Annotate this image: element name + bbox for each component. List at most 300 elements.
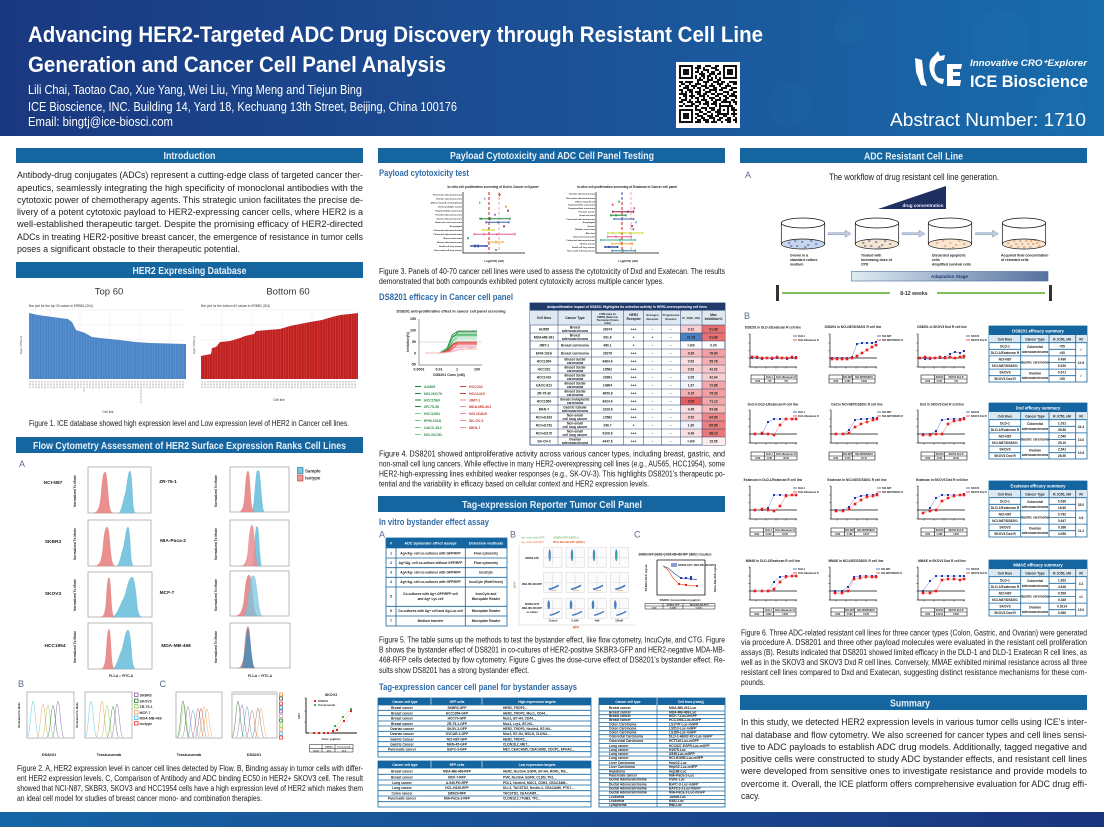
summary text: nal database and flow cytometry. We also screened for cancer types and cell lines sensi- xyxy=(741,730,1087,740)
table: RFP cells low expression targets: MDA-MB-468-RFP xyxy=(443,770,472,774)
resistance charts: Dxd row: SKOV3 xyxy=(971,411,980,414)
summary table: DS8201: 5.520 xyxy=(1058,364,1066,368)
flow plots: bystander co-culture: Ag+ cells with GFP xyxy=(521,536,545,540)
forest plot: Exatecan: Bile duct xyxy=(586,232,595,235)
table: bystander assays: Co-cultures with Ag+-GFP/RFP cell xyxy=(403,592,458,596)
logo: ICE Bioscience: Innovative CRO⁺Explorer xyxy=(970,58,1088,68)
table: DS8201 antiproliferative impact: Antiproliferative Impact of DS8201 Highlights its selective activity in HER2-overexpressing cell lines xyxy=(547,305,707,309)
table: DS8201 antiproliferative impact: - xyxy=(652,376,653,380)
resistance charts: Exatecan row: IC50 xyxy=(835,534,841,536)
summary table: MMAE: 4.818 xyxy=(1058,585,1066,589)
workflow arrows xyxy=(828,230,998,237)
summary table: MMAE: <1 xyxy=(1079,595,1083,599)
resistance charts: DS8201 row: DLD-1/Exatecan R xyxy=(798,339,819,342)
step captions: medium xyxy=(790,262,803,266)
table: DS8201 antiproliferative impact: Breast ductal xyxy=(565,366,586,370)
table: bystander assays: # xyxy=(390,542,393,546)
forest plot: Dxd: Log[IC50] (nM) xyxy=(484,259,504,263)
forest plot: Exatecan xyxy=(566,185,677,263)
resistance charts: Dxd row: DLD-1/Exatecan R xyxy=(798,415,819,418)
summary table: Dxd: Cancer Type xyxy=(1025,414,1045,418)
dose-curve chart: bystander effect: MDA-MB-468 signal xyxy=(713,564,717,592)
table: DS8201 antiproliferative impact: 75.33 xyxy=(709,392,718,396)
table: DS8201 antiproliferative impact: cell lung cancer xyxy=(563,433,588,437)
table: GFP cells high expression targets: OVCAR-3-GFP xyxy=(446,732,469,736)
table: DS8201 antiproliferative impact: - xyxy=(670,432,672,436)
summary table: DS8201: 0.490 xyxy=(1058,358,1066,362)
summary table: MMAE: MMAE efficacy summary xyxy=(1013,562,1063,567)
binding assay overlays B xyxy=(17,692,162,757)
summary table: DS8201: >55 xyxy=(1059,377,1065,381)
table: DS8201 antiproliferative impact: >100 xyxy=(687,440,695,444)
table: GFP cells high expression targets: Breast cancer xyxy=(391,706,414,710)
summary table: Dxd: 44.4 xyxy=(1078,425,1084,429)
table: DS8201 antiproliferative impact: Estrogen xyxy=(646,313,659,317)
step captions: CPD xyxy=(861,262,869,266)
resistance charts: Exatecan row: Exatecan in SKOV3 Dxd R cell line xyxy=(916,478,968,482)
summary table: Dxd: SKOV3 xyxy=(999,448,1011,452)
summary table: MMAE: DLD-1/Exatecan R xyxy=(991,585,1020,589)
authors and affiliation: Lili Chai, Taotao Cao, Xue Yang, Wei Liu, Ying Meng and Tiejun Bing xyxy=(28,83,362,97)
forest plot: Dxd xyxy=(431,185,539,263)
table: DS8201 antiproliferative impact: - xyxy=(652,416,653,420)
summary table: Exatecan: 0.386 xyxy=(1058,526,1066,530)
bar chart: top 60 xyxy=(19,286,186,414)
table: DS8201 antiproliferative impact: MDA-MB-361 xyxy=(534,336,554,340)
SKOV3 EC50 curve: Trastuzumab xyxy=(337,746,351,749)
table: DS8201 antiproliferative impact: 296.7 xyxy=(603,424,612,428)
summary table: Exatecan: DLD-1/Exatecan R xyxy=(991,506,1020,510)
table: ready cell lines: Breast cancer xyxy=(609,714,632,718)
summary table: DS8201: >55 xyxy=(1059,344,1065,348)
adaptation stage bar: Adaptation Stage xyxy=(931,274,968,279)
resistance charts: Dxd row: DLD-1/Exatecan R xyxy=(776,453,796,456)
table: bystander assays: Ag+/Ag- cell co-culture without GFP/RFP xyxy=(399,561,463,565)
table: DS8201 antiproliferative impact: Inhibition% xyxy=(705,317,722,321)
legend: cell lines: MKN-7 xyxy=(469,426,480,430)
table: DS8201 antiproliferative impact: - xyxy=(670,424,672,428)
resistance charts: Exatecan row: 0.530 xyxy=(766,534,772,536)
resistance charts: DS8201 row: >55 xyxy=(954,380,959,383)
table: ready cell lines: Lung cancer xyxy=(609,748,629,752)
table: DS8201 antiproliferative impact: 1.90 xyxy=(688,424,694,428)
table: DS8201 antiproliferative impact: 14804 xyxy=(603,384,612,388)
table: DS8201 antiproliferative impact: 91.86 xyxy=(709,336,718,340)
resistance charts: Exatecan row: NCI-N87/DS8201 R xyxy=(882,491,903,494)
line chart: DS8201 anti-proliferative effect: Inhibition(%) xyxy=(406,332,410,352)
summary table: Exatecan xyxy=(989,481,1087,537)
summary table: DS8201: DS8201 efficacy summary xyxy=(1012,328,1065,333)
summary table: Dxd: NCI-N87 xyxy=(999,434,1012,438)
summary table: Dxd xyxy=(989,403,1087,459)
histograms: high expressing lines: Normalized To Mode xyxy=(73,475,77,507)
table: RFP cells low expression targets: HCL-H226-RFP xyxy=(445,786,470,790)
resistance charts: Exatecan row: SKOV3 xyxy=(971,487,980,490)
summary table: Exatecan: 11.2 xyxy=(1078,529,1084,533)
summary table: MMAE: 15.0 xyxy=(1078,608,1084,612)
resistance charts: Dxd row: Dxd in DLD-1/Exatecan R cell line xyxy=(748,402,799,406)
histograms: high expressing lines xyxy=(44,467,152,678)
resistance charts: Exatecan row xyxy=(744,478,987,536)
table: bystander assays: IncuCyte xyxy=(479,570,493,574)
bar chart: top 60: Cell line xyxy=(102,410,114,414)
step captions: Acquired final concentration xyxy=(1001,254,1048,258)
table: RFP cells low expression targets xyxy=(378,761,591,807)
bar chart: bottom 60 xyxy=(192,286,358,402)
SKOV3 EC50 curve: SKOV3 xyxy=(325,693,337,697)
table: bystander assays: 1 xyxy=(390,552,392,556)
table: DS8201 antiproliferative impact: - xyxy=(670,368,672,372)
table: ready cell lines: LS513-Luc-mGFP xyxy=(669,726,697,730)
panel: flow cytometry assessment: Flow Cytometry Assessment of HER2 Surface Expression Ranks Cell Lines xyxy=(33,441,346,452)
summary table: Exatecan: RI xyxy=(1079,492,1083,496)
flow plots: bystander co-culture: 0.2nM xyxy=(572,620,578,622)
panel label B: B xyxy=(510,530,516,540)
resistance charts: MMAE row: 0.599 xyxy=(847,614,853,616)
summary table: Exatecan: Gastric carcinoma xyxy=(1021,516,1050,520)
table: DS8201 antiproliferative impact: NCI-H2170 xyxy=(536,432,552,436)
workflow diagram xyxy=(776,186,1052,301)
authors and affiliation xyxy=(28,83,457,129)
resistance charts: Dxd row: IC50 xyxy=(833,458,839,460)
step captions: of resistant cells xyxy=(1001,258,1029,262)
step captions: Discarded apoptotic xyxy=(932,254,966,258)
summary table: Dxd: adenocarcinoma xyxy=(1022,453,1048,457)
line chart: DS8201 anti-proliferative effect: 0.0001 xyxy=(414,368,424,372)
SKOV3 EC50 curve: DS8201 xyxy=(325,747,334,749)
table: DS8201 antiproliferative impact: adenocarcinoma xyxy=(562,409,588,413)
line chart: DS8201 anti-proliferative effect: 150 xyxy=(410,317,416,321)
summary table: Dxd: R_IC50, nM xyxy=(1053,414,1071,418)
resistance charts: MMAE row: SKOV3 Dxd R xyxy=(971,572,987,575)
summary table: Exatecan: adenocarcinoma xyxy=(1022,505,1048,509)
table: ready cell lines: HCC1954-Luc-mGFP xyxy=(669,718,702,722)
SKOV3 EC50 curve: MFI xyxy=(297,713,301,719)
panel: summary xyxy=(740,695,1088,801)
legend: cell lines xyxy=(415,385,491,437)
binding assay overlays C: Trastuzumab xyxy=(177,752,202,757)
summary text: cacy. xyxy=(741,791,760,801)
table: DS8201 antiproliferative impact: +++ xyxy=(631,368,637,372)
table: ready cell lines: Lymphoma xyxy=(609,803,627,807)
table: RFP cells low expression targets: TACSTD2, CEACAM5... xyxy=(503,792,539,796)
table: ready cell lines: LS180-Luc-mGFP xyxy=(669,730,697,734)
authors and affiliation: ICE Bioscience, INC. Building 14, Yard 18, Kechuang 13th Street, Beijing, China 100176 xyxy=(28,100,457,114)
table: RFP cells low expression targets: RFP cells xyxy=(450,763,465,767)
summary table: DS8201: Gastric carcinoma xyxy=(1021,360,1050,364)
figure 3 caption: Figure 3. Panels of 40-70 cancer cell lines were used to assess the cytotoxicity of Dxd and Exatecan. The results xyxy=(379,267,725,276)
dose-curve chart: bystander effect: IC50 xyxy=(652,608,657,610)
table: bystander assays: IncuCyte and xyxy=(476,592,496,596)
table: bystander assays: 7 xyxy=(390,619,392,623)
table: DS8201 antiproliferative impact: Receptor xyxy=(627,317,642,321)
legend: cell lines: SKOV3 xyxy=(140,700,152,704)
table: DS8201 antiproliferative impact: 0.45 xyxy=(688,408,694,412)
summary table: MMAE: Ovarian xyxy=(1029,606,1041,610)
summary table: Exatecan: NCI-N87 xyxy=(999,512,1012,516)
summary table: Dxd: 26.90 xyxy=(1058,454,1066,458)
table: DS8201 antiproliferative impact: Receptor xyxy=(665,317,677,321)
dose-curve chart: bystander effect: SKBR3-GFP (HER2+) MDA-MB-468-RFP (HER2-) Coculture xyxy=(638,552,712,556)
panel: introduction xyxy=(16,148,364,254)
histograms: low expressing lines: ZR-75-1 xyxy=(159,479,177,485)
table: ready cell lines: Lung cancer xyxy=(609,756,629,760)
legend: sample and isotype: Sample xyxy=(305,468,321,474)
summary table: DS8201: NCI-N87/DS8201 xyxy=(992,364,1018,368)
figure 5 caption: B shows the bystander effect of DS8201 in co-cultures of HER2-positive SKBR3-GFP and HER2-negative MDA-MB- xyxy=(379,646,725,654)
flow plots: bystander co-culture: co-culture xyxy=(526,611,538,614)
table: DS8201 antiproliferative impact: + xyxy=(633,336,635,340)
summary table: Exatecan: adenocarcinoma xyxy=(1022,531,1048,535)
resistance charts: MMAE row: 0.560 xyxy=(953,614,960,616)
table: DS8201 antiproliferative impact: 15.56 xyxy=(709,440,718,444)
table: ready cell lines: DLD-1-HER2-KO-Luc-mGFP xyxy=(669,734,713,738)
table: GFP cells high expression targets: Muc1, Lrp1, B7-H4... xyxy=(503,722,535,726)
resistance charts: MMAE row: IC50 xyxy=(754,614,760,616)
resistance charts: Dxd row: 26.90 xyxy=(953,458,960,460)
resistance charts: MMAE row: 4.818 xyxy=(782,613,789,616)
table: ready cell lines xyxy=(599,698,725,807)
table: DS8201 antiproliferative impact: adenocarcinoma xyxy=(562,329,588,333)
table: DS8201 antiproliferative impact xyxy=(530,303,725,445)
flow plots: bystander co-culture: Control xyxy=(549,620,558,622)
table: DS8201 antiproliferative impact: - xyxy=(652,440,653,444)
table: ready cell lines: Ductal Adenocarcinoma xyxy=(609,786,647,790)
table: DS8201 antiproliferative impact: 0.31 xyxy=(688,328,694,332)
resistance charts: MMAE row: IC50 xyxy=(925,614,931,616)
resistance charts: Exatecan row: IC50 xyxy=(754,534,760,536)
binding assay overlays C: DS8201 xyxy=(247,752,262,757)
summary table: MMAE: 3.2 xyxy=(1079,582,1083,586)
legend: cell lines: SK-OV-3 xyxy=(469,419,483,423)
figure 5 caption: 468-RFP cells detected by flow cytometry. Figure C gives the dose-curve effect of DS8201's bystander effect. Re- xyxy=(379,656,725,664)
table: DS8201 antiproliferative impact: Non-small xyxy=(567,422,583,426)
flow plots: bystander co-culture: Ag- cells with RFP xyxy=(521,540,544,544)
table: RFP cells low expression targets: Pancreatic cancer xyxy=(388,797,417,801)
table: DS8201 antiproliferative impact: 28276 xyxy=(603,352,612,356)
summary table: Dxd: DLD-1 xyxy=(1000,422,1010,426)
table: bystander assays: Co-cultures with Ag+ cell and Ag-Luc cell xyxy=(398,609,463,613)
table: DS8201 antiproliferative impact: Gastric tubular xyxy=(563,406,587,410)
dose-curve chart: bystander effect xyxy=(638,552,717,610)
table: RFP cells low expression targets: Colon cancer xyxy=(392,792,413,796)
table: DS8201 antiproliferative impact: Progesterone xyxy=(663,313,680,317)
line chart: DS8201 anti-proliferative effect: 1 xyxy=(456,368,458,372)
footer band xyxy=(0,812,1104,827)
resistance charts: MMAE row: NCI-N87/DS8201 R xyxy=(881,572,902,575)
resistance charts: Exatecan row: DLD-1/Exatecan R xyxy=(775,529,795,532)
table: bystander assays: Detection methods xyxy=(469,542,503,546)
resistance charts: DS8201 row: NCI-N87 xyxy=(843,377,853,379)
forest plot: Exatecan: Non-small cell lung cancer xyxy=(567,250,595,252)
histograms: low expressing lines: Normalized To Mode xyxy=(214,475,218,507)
table: DS8201 antiproliferative impact: - xyxy=(670,360,672,364)
logo: ICE Bioscience xyxy=(915,51,1088,91)
table: ready cell lines: H1975-Luc xyxy=(669,748,686,752)
table: DS8201 antiproliferative impact: Ovarian xyxy=(569,438,581,442)
panel: HER2 expressing database: HER2 Expressing Database xyxy=(132,266,247,277)
summary text: were developed from sensitive ones to investigate resistance and provide models to xyxy=(740,766,1087,776)
table: ready cell lines: Breast cancer xyxy=(609,706,632,710)
summary table: Dxd: 10.0 xyxy=(1078,438,1084,442)
table: DS8201 antiproliferative impact: - xyxy=(652,360,653,364)
histograms: low expressing lines: MIA-Paca-2 xyxy=(160,538,186,544)
table: GFP cells high expression targets: Breast cancer xyxy=(391,722,414,726)
table: DS8201 antiproliferative impact: 18562 xyxy=(603,368,612,372)
table: DS8201 antiproliferative impact: +++ xyxy=(631,408,637,412)
forest plot: Dxd: Colorectal adenocarcinoma xyxy=(433,233,463,236)
figure 2 caption xyxy=(17,764,364,803)
binding assay overlays B: Normalized To Mode xyxy=(75,702,79,728)
panel label A: A xyxy=(745,170,751,180)
table: bystander assays: Microplate Reader xyxy=(472,609,501,613)
bar chart: top 60: Bar plot for the top 30 values in ERBB2 (204) xyxy=(29,304,93,308)
table: RFP cells low expression targets: HER2, Nectin4, EGFR, B7-H4, ROR1, MS... xyxy=(503,770,568,774)
panel: HER2 expressing database xyxy=(16,262,363,428)
table: DS8201 antiproliferative impact: - xyxy=(652,384,653,388)
panel label C: C xyxy=(160,679,166,689)
table: ready cell lines: A549-Luc-mGFP xyxy=(669,752,695,756)
forest plot: Exatecan: Bladder carcinoma xyxy=(575,229,596,231)
summary table: Dxd: Colorectal xyxy=(1027,422,1043,426)
table: DS8201 antiproliferative impact: 0.52 xyxy=(688,360,694,364)
table: ready cell lines: Ductal Adenocarcinoma xyxy=(609,778,647,782)
forest plot: Exatecan: Head and neck xyxy=(580,215,596,217)
flow plots: bystander co-culture xyxy=(513,536,635,630)
introduction text: poses a significant obstacle to their therapeutic potential. xyxy=(17,244,240,254)
figure 2 caption: an ideal cell model for studies of breast cancer mono- and combination therapies. xyxy=(17,794,262,803)
flow plots: bystander co-culture: GFP xyxy=(513,581,517,588)
table: DS8201 antiproliferative impact: 0.15 xyxy=(688,392,694,396)
forest plot: Dxd: Hepatocellular carcinoma xyxy=(435,210,463,212)
summary table: MMAE: 0.345 xyxy=(1058,598,1066,602)
line chart: DS8201 anti-proliferative effect: 100 xyxy=(410,328,416,332)
table: DS8201 antiproliferative impact: - xyxy=(670,336,672,340)
table: DS8201 antiproliferative impact: - xyxy=(670,384,672,388)
introduction text: Antibody-drug conjugates (ADCs) represent a cutting-edge class of targeted cancer ther- xyxy=(17,170,363,180)
table: DS8201 antiproliferative impact: 72.88 xyxy=(709,384,718,388)
summary table: DS8201: DLD-1/Exatecan R xyxy=(991,351,1020,355)
summary text xyxy=(740,717,1088,801)
table: DS8201 antiproliferative impact: - xyxy=(670,328,672,332)
histograms: high expressing lines: SKBR3 xyxy=(45,539,61,545)
table: GFP cells high expression targets: HER2, TROP2... xyxy=(503,706,527,710)
flow plots: bystander co-culture: MDA-MB-468-RFP (HER2-) xyxy=(553,540,585,544)
legend: cell lines: HCC1954 xyxy=(424,412,440,416)
histograms: high expressing lines: Normalized To Mode xyxy=(73,631,77,663)
table: ready cell lines: PSN1-Luc xyxy=(669,778,685,782)
table: ready cell lines: HCT116-Luc-mGFP xyxy=(669,739,700,743)
histograms: low expressing lines: FL1-A :: FITC-A xyxy=(248,674,273,678)
table: DS8201 antiproliferative impact: 0.05 xyxy=(688,400,694,404)
summary table: Exatecan: 0.530 xyxy=(1058,500,1066,504)
table: DS8201 antiproliferative impact: - xyxy=(670,408,672,412)
forest plot: Exatecan: Log[IC50] (nM) xyxy=(618,259,638,263)
panel label A: A xyxy=(379,530,385,540)
table: GFP cells high expression targets: Muc1, B7-H4, MSLN, CLDN4... xyxy=(503,732,550,736)
resistance charts: Exatecan row: 0.782 xyxy=(847,534,853,536)
figure 2 caption: Figure 2. A, HER2 expression level in cancer cell lines detected by Flow. B, Binding assay in tumor cells with differ- xyxy=(17,764,363,773)
summary table: Exatecan: 3.647 xyxy=(1058,519,1066,523)
step captions: standard culture xyxy=(790,258,817,262)
summary table: MMAE: SKOV3 xyxy=(999,604,1011,608)
flow plots: bystander co-culture: MDA-MB-468-RFP xyxy=(522,607,543,610)
table: DS8201 antiproliferative impact: cell lung cancer xyxy=(563,425,588,429)
table: DS8201 antiproliferative impact: Breast metaplastic xyxy=(560,398,590,402)
histograms: high expressing lines: Normalized To Mode xyxy=(73,579,77,611)
resistance charts: Dxd row: DLD-1 xyxy=(798,411,806,414)
table: bystander assays: and Ag+ Lys cell xyxy=(418,597,444,601)
summary table: MMAE: 0.599 xyxy=(1058,592,1066,596)
figure 5 caption xyxy=(379,636,725,675)
table: DS8201 antiproliferative impact: - xyxy=(652,328,653,332)
histograms: low expressing lines: Normalized To Mode xyxy=(214,528,218,560)
summary table: Exatecan: 4.050 xyxy=(1058,532,1066,536)
table: DS8201 antiproliferative impact: HCC1419 xyxy=(537,376,551,380)
resistance charts: MMAE row: MMAE in SKOV3 Dxd R cell line xyxy=(918,559,966,563)
summary table: DS8201: / xyxy=(1081,374,1082,378)
table: DS8201 antiproliferative impact: - xyxy=(670,376,672,380)
table: DS8201 antiproliferative impact: HER2 xyxy=(629,313,638,317)
table: bystander assays: Microplate Reader xyxy=(472,619,501,623)
legend: cell lines xyxy=(134,693,162,726)
resistance charts: Dxd row: 2.540 xyxy=(845,457,851,460)
SKOV3 EC50 curve: 25.3 xyxy=(342,750,347,752)
table: bystander assays: Flow cytometry xyxy=(474,561,498,565)
table: ready cell lines: LS174T-Luc-mGFP xyxy=(669,722,699,726)
legend: cell lines: HCC1419 xyxy=(469,392,485,396)
step captions: Grown in a xyxy=(790,254,808,258)
table: ready cell lines: Hep3B-Luc xyxy=(669,770,687,774)
summary table: Exatecan: 4.6 xyxy=(1079,516,1083,520)
step captions: Amplified survival cells xyxy=(932,262,971,266)
resistance charts: Exatecan row: 3.647 xyxy=(863,533,870,536)
table: GFP cells high expression targets: SKOV-3-GFP xyxy=(447,727,468,731)
panel label B: B xyxy=(18,679,24,689)
table: DS8201 antiproliferative impact: NCI-H1819 xyxy=(536,416,552,420)
table: ready cell lines: Breast cancer xyxy=(609,710,632,714)
forest plot: Exatecan: Hepatocellular carcinoma xyxy=(568,204,596,206)
resistance charts: Dxd row: SKOV3 xyxy=(936,454,944,456)
resistance charts: Dxd row: 25.10 xyxy=(861,458,868,460)
figure 4 caption: HER2-high-expressing lines exhibited weaker responses (e.g., SK-OV-3). This highlights DS8201's therapeutic po- xyxy=(379,470,725,478)
table: ready cell lines: HepG2-Luc-mGFP xyxy=(669,765,698,769)
table: bystander assays: 3 xyxy=(390,570,392,574)
summary table: Dxd: 1.031 xyxy=(1058,422,1066,426)
table: RFP cells low expression targets: MIA-PaCa-2-RFP xyxy=(444,797,471,801)
table: DS8201 antiproliferative impact: adenocarcinoma xyxy=(562,337,588,341)
table: GFP cells high expression targets: Ovarian cancer xyxy=(390,727,415,731)
table: DS8201 antiproliferative impact: carcinoma xyxy=(567,385,583,389)
summary text: In this study, we detected HER2 expression levels in various tumor cells using ICE's inter- xyxy=(741,717,1087,727)
QR code xyxy=(676,62,740,128)
summary table: Exatecan: SKOV3 Dxd R xyxy=(994,532,1016,536)
binding assay overlays C xyxy=(176,692,282,757)
forest plot: Dxd: Breast adenocarcinoma xyxy=(437,241,463,244)
table: ready cell lines: BxPC-3-Luc-mGFP xyxy=(669,782,699,786)
table: ready cell lines: Cancer cell type xyxy=(615,700,641,704)
figure 5 caption: Figure 5. The table sums up the methods to test the bystander effect, like flow cytometry, IncuCyte, and CTG. Figure xyxy=(379,636,725,644)
table: DS8201 antiproliferative impact: AU565 xyxy=(539,328,549,332)
SKOV3 EC50 curve: DS8201 xyxy=(318,699,329,703)
forest plot: Dxd: Esophageal xyxy=(450,226,462,228)
legend: cell lines: NCI-H2170 xyxy=(424,392,442,396)
table: DS8201 antiproliferative impact: - xyxy=(652,344,653,348)
step captions: increasing dose of xyxy=(861,258,893,262)
flow plots: bystander co-culture: SKBR3-GFP (HER2+) xyxy=(553,536,579,540)
SKOV3 EC50 curve: Trastuzumab xyxy=(318,703,336,707)
forest plot: Dxd: Gastric adenocarcinoma xyxy=(436,218,463,220)
